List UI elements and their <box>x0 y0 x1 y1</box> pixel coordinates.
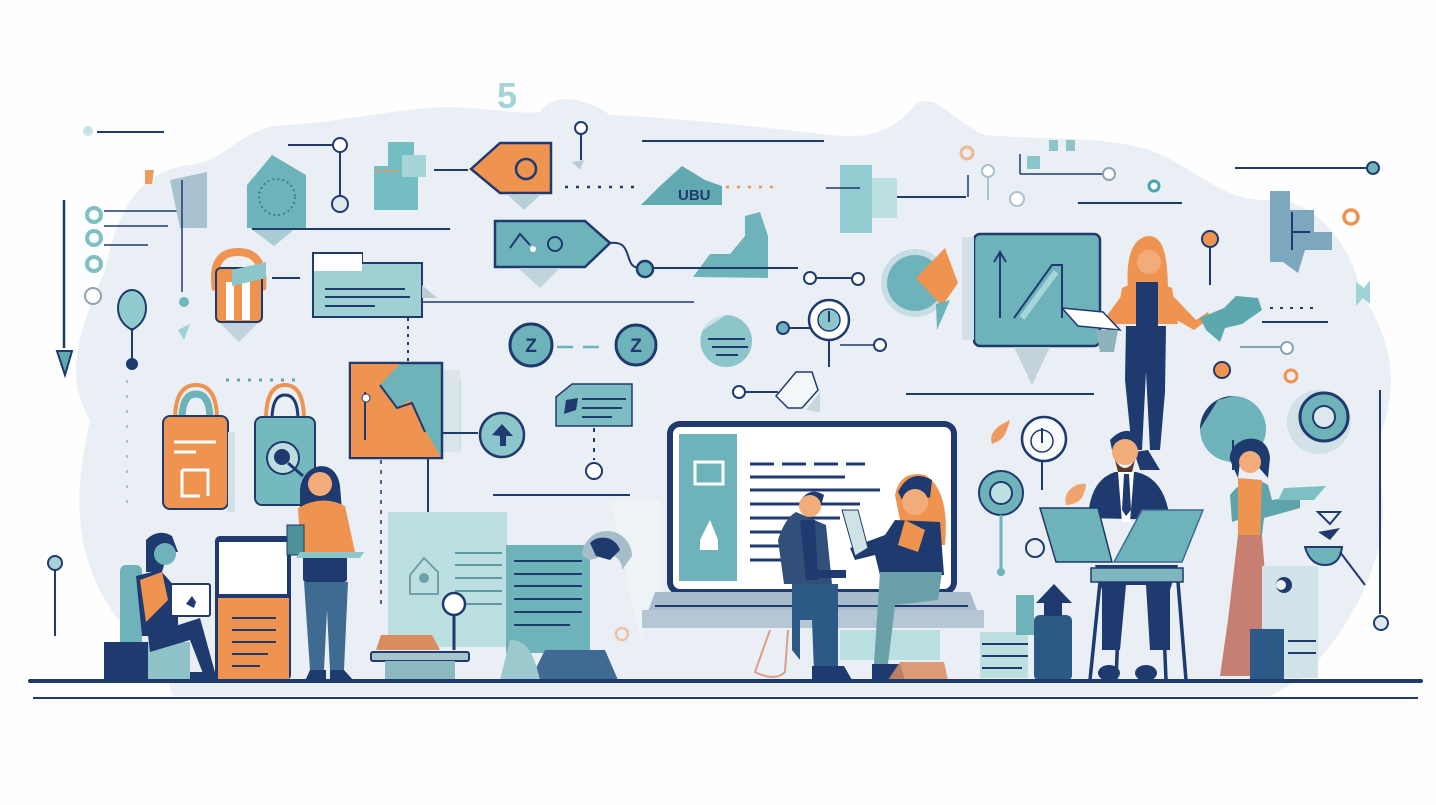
icon: teal house with label <box>641 166 776 205</box>
icon: orange tag <box>434 143 640 210</box>
bench table <box>642 592 984 677</box>
icon: teal square cluster <box>826 165 968 233</box>
icon: teal blocks <box>374 142 426 210</box>
icon: Z badges <box>510 324 656 366</box>
desk with books and pin <box>371 593 618 681</box>
icon: list disc <box>700 315 752 367</box>
map panel <box>350 363 478 610</box>
left column of small connectors <box>57 126 207 510</box>
person: seated left with laptop <box>48 533 220 680</box>
person: standing woman with red hair <box>1062 236 1210 470</box>
small S mark: 5 <box>497 75 517 116</box>
icon: teal house badge <box>247 138 450 246</box>
background blob <box>76 99 1391 696</box>
top right connectors <box>961 140 1379 206</box>
icon: leaf circle <box>480 413 630 495</box>
arrow bottle and stack <box>980 584 1072 681</box>
documents group centre-left <box>388 512 632 653</box>
chart panel <box>962 234 1100 385</box>
icon: power pin <box>733 300 1094 412</box>
right circles <box>1200 390 1351 470</box>
icon: search arrow banner <box>495 221 653 288</box>
person: standing woman orange top <box>287 466 364 681</box>
person: woman in long skirt <box>1220 439 1365 681</box>
icon: Z badges: Z <box>525 336 537 357</box>
ground lines <box>30 681 1421 698</box>
large monitor with text <box>670 424 954 592</box>
person: seated man at monitor <box>778 492 852 680</box>
icon: teal hand block <box>654 212 864 285</box>
person: seated woman at monitor <box>842 474 948 680</box>
icon: orange padlock badge <box>215 252 300 342</box>
icon: chat card <box>556 384 632 479</box>
right side connectors <box>1200 231 1388 630</box>
icon: teal house with label: UBU <box>678 187 710 204</box>
pin connector top <box>572 122 824 170</box>
small ring <box>616 628 628 640</box>
power and target pins <box>979 417 1086 576</box>
icon: Z badges: Z <box>630 336 642 357</box>
padlocks <box>163 380 315 512</box>
white patch: lower centre <box>610 500 660 640</box>
icon: blue flowchart right <box>1270 191 1370 306</box>
icon: document folder <box>313 253 694 362</box>
person: man with laptop <box>1040 431 1203 681</box>
icon: pie chart <box>881 248 958 330</box>
kiosk machine <box>215 536 291 680</box>
